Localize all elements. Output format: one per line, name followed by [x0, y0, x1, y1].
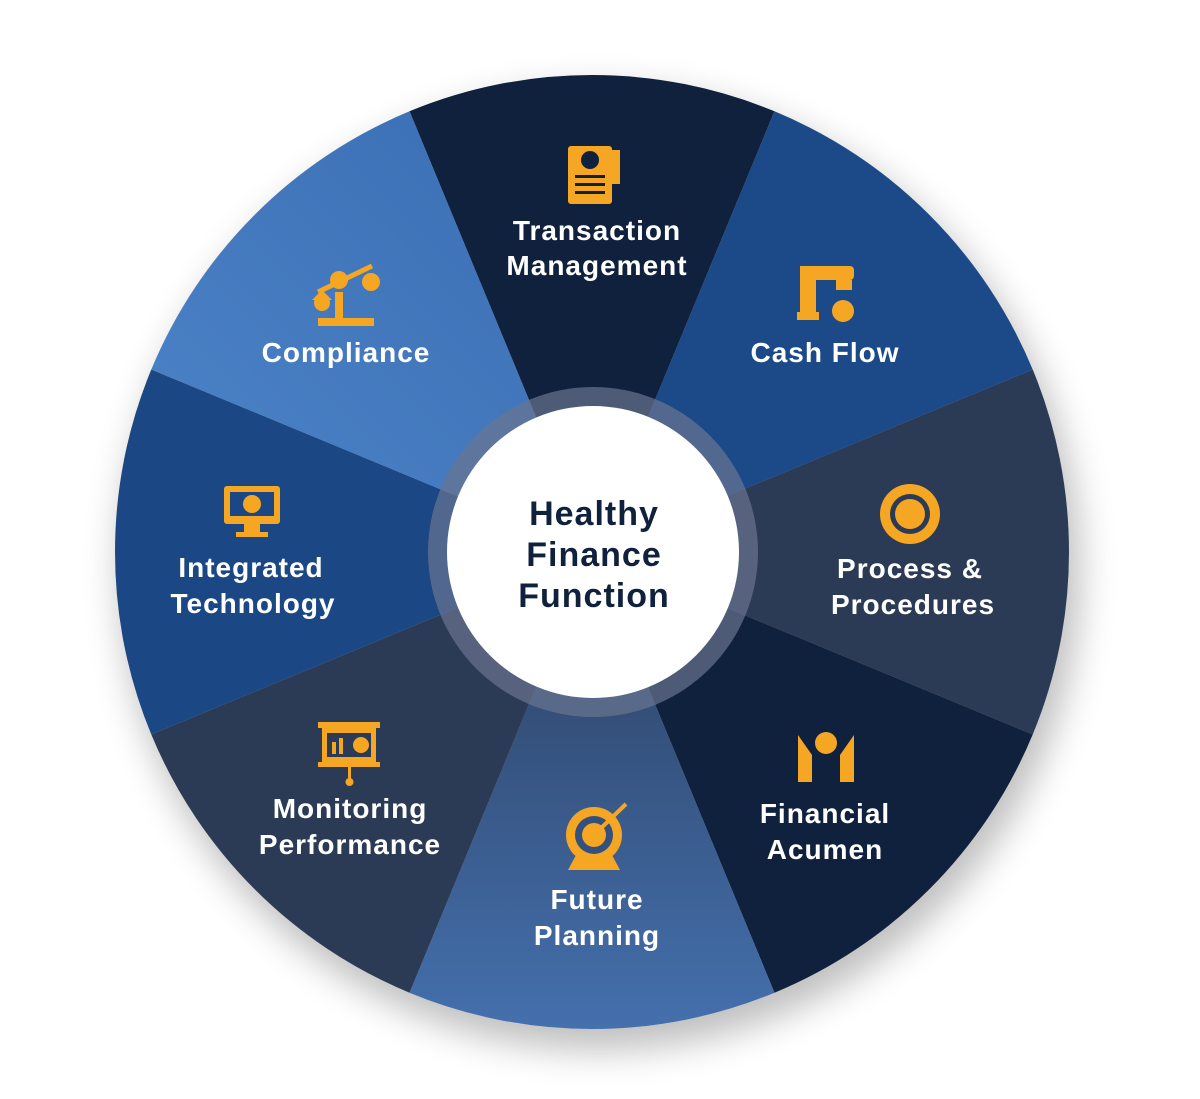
segment: financial acumen: [592, 552, 1033, 993]
segment: monitoring performance: [151, 552, 592, 993]
label: Monitoring: [273, 793, 427, 824]
icon: target: [566, 804, 626, 870]
center circle: Healthy: [529, 495, 659, 533]
segment: integrated technology: Technology: [170, 588, 336, 619]
segment: compliance: [151, 111, 592, 552]
segment: financial acumen: Acumen: [767, 834, 883, 865]
segment: cash flow: [592, 111, 1033, 552]
icon: scales: [312, 266, 380, 326]
center ring: [428, 387, 758, 717]
segment: monitoring performance: Performance: [259, 829, 441, 860]
icon: presentation board: [318, 722, 380, 786]
segment: process & procedures: [592, 370, 1069, 734]
label: Cash Flow: [750, 337, 900, 368]
segment: future planning: [410, 552, 774, 1029]
label: Integrated: [178, 552, 324, 583]
icon: receipt: [568, 146, 620, 204]
label: Future: [550, 884, 644, 915]
label: Compliance: [262, 337, 430, 368]
segment: future planning: Planning: [534, 920, 660, 951]
icon: gear coin: [880, 484, 940, 544]
center circle: [447, 406, 739, 698]
icon: monitor: [224, 486, 280, 537]
label: Process &: [837, 553, 983, 584]
segment: transaction management: [410, 75, 774, 552]
icon: hands coin: [798, 732, 854, 782]
label: Financial: [760, 798, 890, 829]
center circle: Function: [518, 577, 670, 615]
segment: integrated technology: [115, 370, 592, 734]
center circle: Finance: [526, 536, 662, 574]
icon: tap: [797, 266, 854, 322]
label: Transaction: [513, 215, 681, 246]
segment: transaction management: Management: [506, 250, 688, 281]
segment: process & procedures: Procedures: [831, 589, 995, 620]
